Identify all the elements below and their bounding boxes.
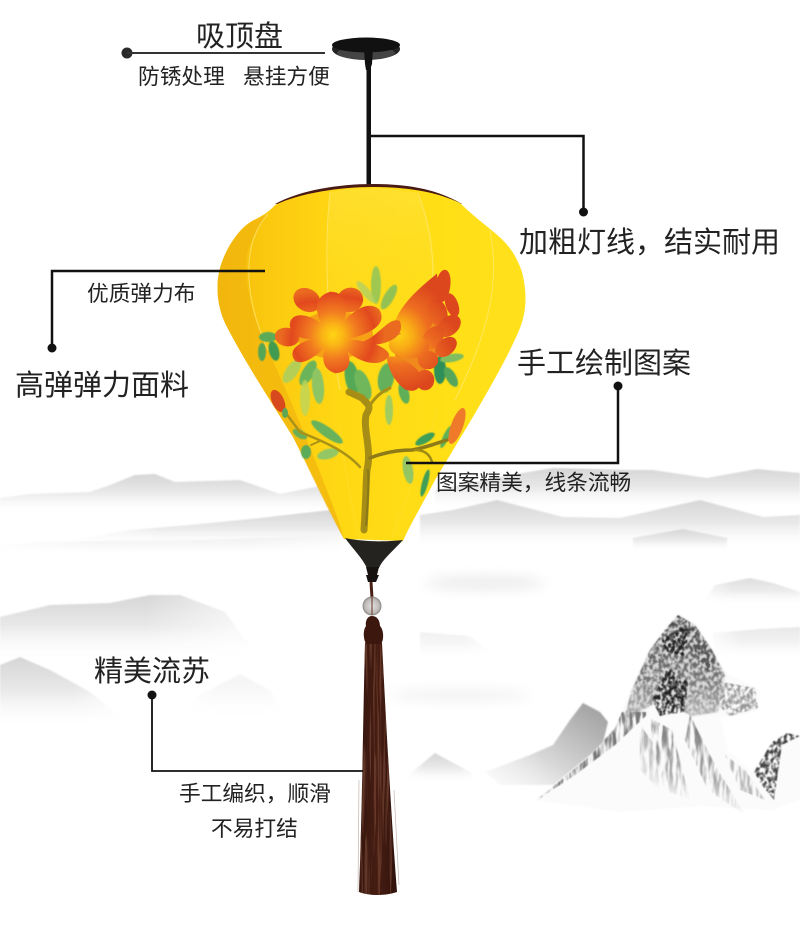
text: ceiling plate detail 2: 悬挂方便 xyxy=(243,64,330,89)
small side blossoms xyxy=(267,388,469,446)
painted branches xyxy=(285,388,447,530)
callout: ceiling plate xyxy=(122,20,330,89)
callout: thick wire xyxy=(371,136,780,259)
painted peony left xyxy=(275,285,400,372)
callout: hand painted pattern xyxy=(406,347,691,495)
callout: tassel xyxy=(94,655,363,841)
text: ceiling plate detail: 防锈处理 xyxy=(138,64,225,89)
text: fabric detail: 优质弹力布 xyxy=(87,281,195,306)
lantern bottom cap xyxy=(345,538,403,582)
heading: tassel: 精美流苏 xyxy=(94,655,210,688)
heading: fabric: 高弹弹力面料 xyxy=(15,369,189,402)
tassel xyxy=(358,616,399,895)
text: tassel detail 2: 不易打结 xyxy=(211,816,298,841)
background: ink wash mist landscape xyxy=(0,468,800,784)
top rim xyxy=(275,184,462,204)
lantern silk body xyxy=(217,187,526,541)
centre highlighted panel xyxy=(327,188,436,380)
ceiling plate xyxy=(332,38,400,70)
left darker panel xyxy=(217,214,344,539)
heading: pattern: 手工绘制图案 xyxy=(517,347,691,380)
text: tassel detail: 手工编织，顺滑 xyxy=(179,781,331,806)
heading: thick wire: 加粗灯线，结实耐用 xyxy=(519,226,780,259)
heading: ceiling plate: 吸顶盘 xyxy=(196,20,283,53)
glass bead xyxy=(362,582,382,616)
text: pattern detail: 图案精美，线条流畅 xyxy=(436,470,631,495)
painted leaves xyxy=(258,266,465,497)
painted peony right xyxy=(388,270,463,390)
silk seams xyxy=(249,192,494,538)
ink mountains xyxy=(485,615,800,815)
lantern xyxy=(217,38,526,895)
callout: elastic fabric xyxy=(15,271,265,402)
lamp wire xyxy=(366,66,371,186)
